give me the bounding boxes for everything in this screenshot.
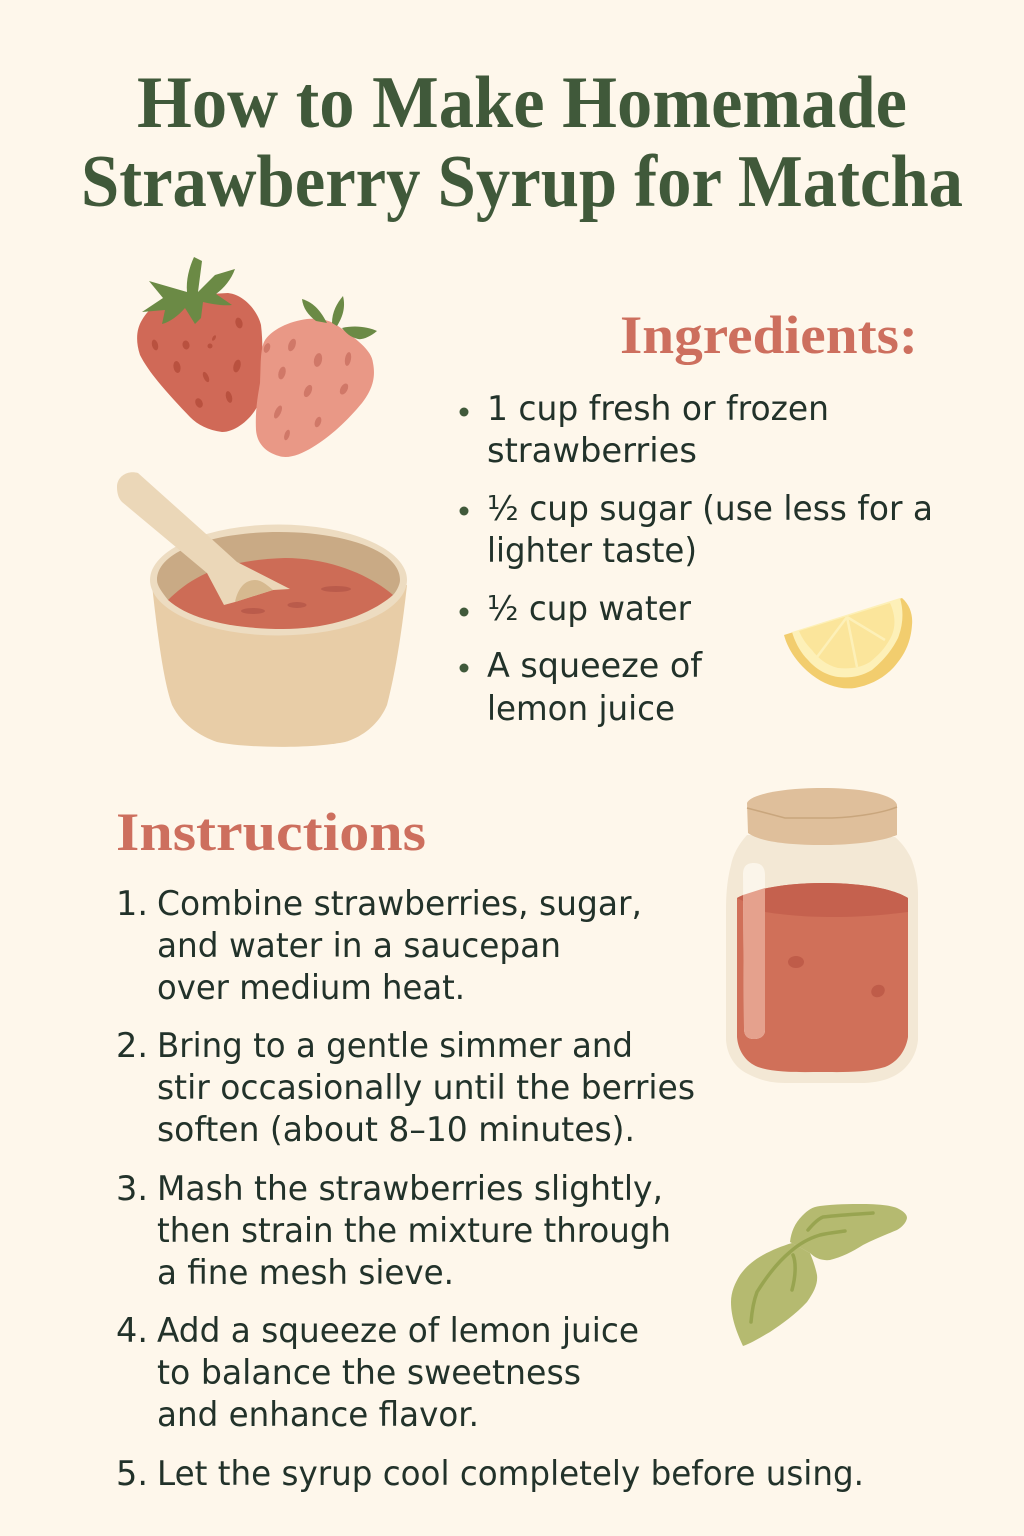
instructions list: soften (about 8–10 minutes). bbox=[157, 1110, 635, 1149]
ingredients list: 1 cup fresh or frozen bbox=[487, 389, 829, 428]
instructions list: 3. bbox=[116, 1169, 148, 1208]
ingredients list: strawberries bbox=[487, 431, 697, 470]
instructions list: a fine mesh sieve. bbox=[157, 1253, 454, 1292]
instructions list bbox=[116, 884, 864, 1493]
instructions list: 5. bbox=[116, 1454, 148, 1493]
instructions list: then strain the mixture through bbox=[157, 1211, 671, 1250]
instructions list: stir occasionally until the berries bbox=[157, 1068, 695, 1107]
instructions list: 4. bbox=[116, 1311, 148, 1350]
instructions list: 2. bbox=[116, 1026, 148, 1065]
heading: ingredients: Ingredients: bbox=[620, 305, 918, 365]
instructions list: and enhance flavor. bbox=[157, 1395, 479, 1434]
title: How to Make Homemade bbox=[137, 62, 907, 144]
icon: red strawberry bbox=[137, 257, 262, 432]
instructions list: Mash the strawberries slightly, bbox=[157, 1169, 663, 1208]
icon: pink strawberry bbox=[256, 296, 377, 457]
icon: lemon wedge bbox=[784, 598, 912, 688]
ingredients list: lemon juice bbox=[487, 689, 675, 728]
ingredients list: A squeeze of bbox=[487, 646, 703, 685]
instructions list: and water in a saucepan bbox=[157, 926, 561, 965]
ingredients list bbox=[460, 389, 933, 728]
instructions list: Combine strawberries, sugar, bbox=[157, 884, 642, 923]
instructions list: Bring to a gentle simmer and bbox=[157, 1026, 633, 1065]
ingredients list: lighter taste) bbox=[487, 531, 697, 570]
instructions list: Add a squeeze of lemon juice bbox=[157, 1311, 639, 1350]
ingredients list: ½ cup sugar (use less for a bbox=[487, 489, 933, 528]
title bbox=[81, 62, 963, 223]
instructions list: over medium heat. bbox=[157, 968, 465, 1007]
instructions list: to balance the sweetness bbox=[157, 1353, 581, 1392]
instructions list: Let the syrup cool completely before using. bbox=[157, 1454, 864, 1493]
instructions list: 1. bbox=[116, 884, 148, 923]
heading: instructions: Instructions bbox=[116, 802, 426, 862]
title: Strawberry Syrup for Matcha bbox=[81, 141, 963, 223]
icon: basil leaves bbox=[731, 1204, 907, 1346]
icon: jar of syrup bbox=[726, 788, 918, 1083]
ingredients list: ½ cup water bbox=[487, 589, 691, 628]
icon: bowl of strawberry sauce with spoon bbox=[117, 472, 407, 747]
